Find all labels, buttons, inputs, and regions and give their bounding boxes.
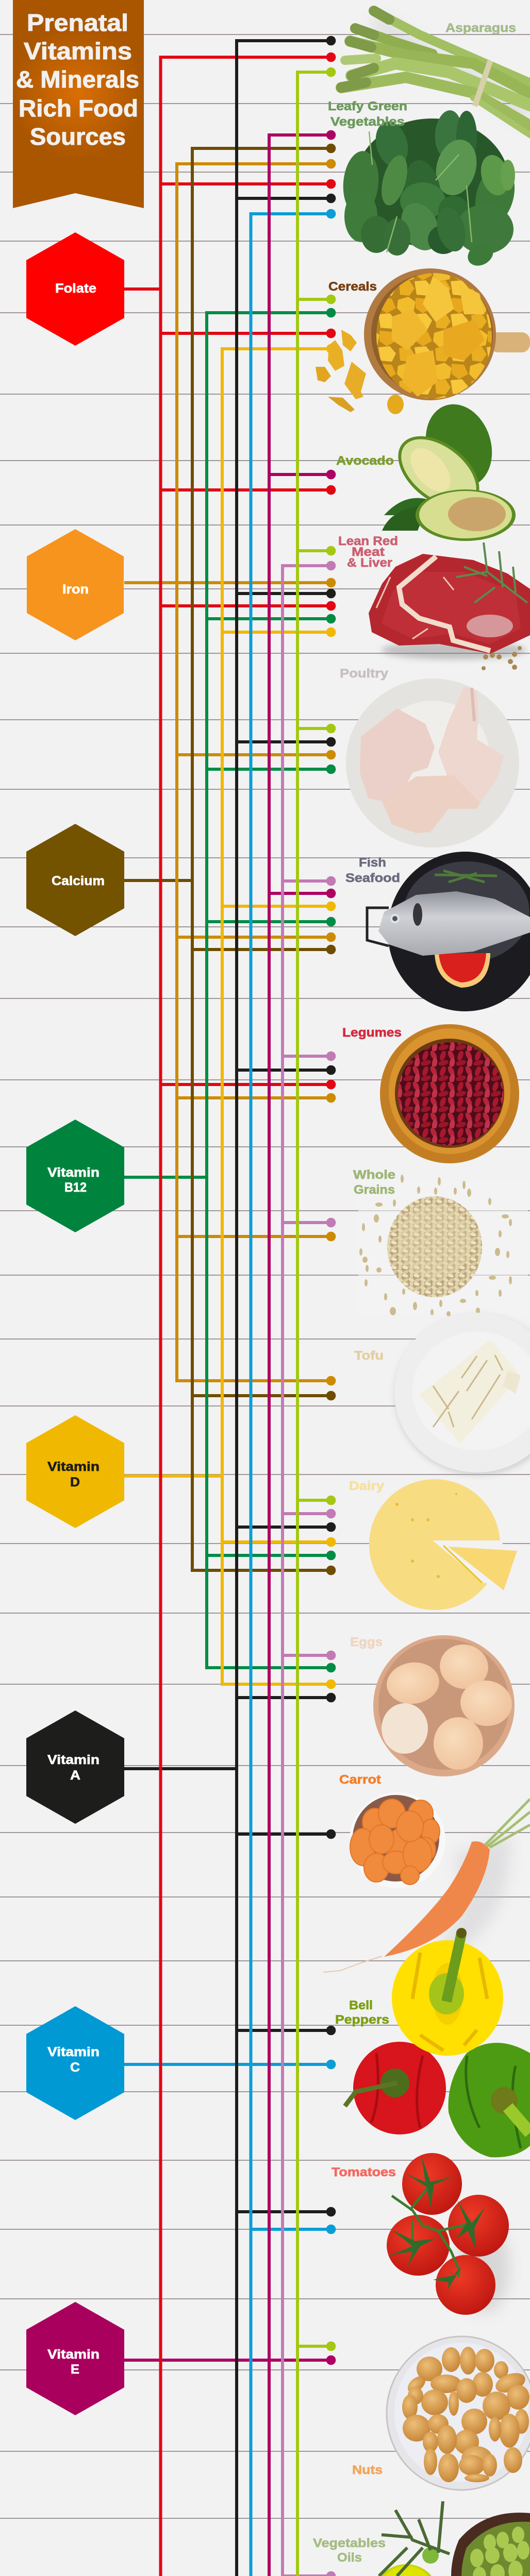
branches: vitamin B complex — [124, 561, 336, 2576]
food image: tofu on white plate — [394, 1313, 530, 1475]
food image: fish on black pan with grapefruit — [367, 852, 530, 1011]
title banner: Rich Food — [19, 95, 138, 122]
hexagon: Vitamin D: Vitamin — [47, 1460, 100, 1474]
label: Tofu: Tofu — [354, 1349, 384, 1363]
branches: zinc — [124, 67, 336, 2576]
label: Lean Red Meat & Liver: Lean Red — [338, 534, 398, 548]
label: Nuts: Nuts — [352, 2463, 383, 2477]
food image: whole grain oats — [358, 1175, 528, 1316]
label: Asparagus: Asparagus — [445, 21, 516, 35]
label: Carrot: Carrot — [339, 1773, 381, 1787]
hexagon: Vitamin D — [26, 1415, 124, 1528]
label: Leafy Green Vegetables: Vegetables — [330, 115, 405, 129]
label: Leafy Green Vegetables — [328, 99, 407, 129]
food image: bowl of cereal flakes — [316, 268, 530, 414]
hexagon: Folate — [26, 232, 124, 346]
label: Fish Seafood: Seafood — [345, 871, 400, 885]
hexagon: Calcium — [26, 824, 124, 936]
vertical trunk lines for all nutrients — [161, 39, 297, 2576]
food image: mixed nuts in glass bowl — [387, 2336, 530, 2490]
label: Leafy Green Vegetables: Leafy Green — [328, 99, 407, 113]
hexagon: Vitamin B12: Vitamin — [47, 1165, 100, 1180]
label: Whole Grains — [353, 1168, 395, 1197]
title banner: Prenatal — [27, 9, 128, 36]
label: Vegetables Oils: Oils — [337, 2551, 362, 2565]
label: Bell Peppers: Bell — [349, 1998, 373, 2012]
branches: calcium — [124, 144, 336, 1575]
label: Avocado: Avocado — [336, 454, 394, 468]
food image: dairy cheese wheel with wedge — [369, 1479, 517, 1610]
label: Eggs: Eggs — [350, 1635, 383, 1649]
branches: folate — [124, 53, 336, 2576]
food image: spinach leaves — [341, 109, 521, 270]
label: Lean Red Meat & Liver — [338, 534, 398, 570]
label: Fish Seafood: Fish — [359, 856, 386, 870]
food image: bell peppers yellow red green — [345, 1928, 530, 2157]
hexagon: Folate: Folate — [55, 281, 96, 296]
hexagon: Vitamin B12: B12 — [64, 1180, 87, 1195]
food image: olives, olive oil and leaves — [373, 2501, 530, 2576]
hexagon: Vitamin A — [26, 1710, 124, 1824]
hexagon: Vitamin C — [26, 2006, 124, 2120]
branches: vitamin B12 — [124, 308, 336, 1672]
food image: tomatoes on the vine — [387, 2153, 509, 2315]
hexagon: Vitamin E: Vitamin — [47, 2347, 100, 2362]
title banner: & Minerals — [16, 66, 139, 93]
hexagon: Vitamin E — [26, 2302, 124, 2415]
branches: vitamin D — [124, 344, 336, 1689]
label: Whole Grains: Whole — [353, 1168, 395, 1182]
food image: carrot slices and whole carrot — [323, 1792, 530, 1973]
label: Bell Peppers — [335, 1998, 389, 2027]
food image: kidney beans in wooden bowl — [380, 1024, 519, 1163]
hexagon: Calcium: Calcium — [52, 874, 105, 888]
title banner — [13, 0, 144, 208]
hexagon: Iron: Iron — [62, 582, 89, 597]
label: Lean Red Meat & Liver: Meat — [352, 545, 385, 559]
label: Whole Grains: Grains — [354, 1183, 395, 1197]
hexagon: Vitamin B12 — [26, 1120, 124, 1232]
food image: avocado — [382, 396, 516, 541]
branches: vitamin E — [124, 130, 336, 2576]
label: Vegetables Oils — [313, 2536, 386, 2565]
label: Poultry: Poultry — [340, 667, 389, 681]
hexagon: Iron — [27, 529, 124, 640]
food image: asparagus — [341, 11, 530, 135]
label: Lean Red Meat & Liver: & Liver — [347, 556, 392, 570]
hexagon: Vitamin D: D — [70, 1475, 80, 1489]
hexagon: Vitamin A: A — [70, 1768, 80, 1783]
label: Cereals: Cereals — [328, 280, 377, 294]
branches: iron — [124, 159, 336, 1385]
label: Legumes: Legumes — [342, 1026, 402, 1040]
food image: red meat with rosemary — [369, 543, 530, 670]
branches: vitamin C — [124, 209, 336, 2576]
label: Fish Seafood — [345, 856, 400, 885]
label: Dairy: Dairy — [349, 1479, 385, 1493]
title banner: Vitamins — [24, 38, 132, 64]
title banner: Sources — [30, 123, 126, 150]
label: Bell Peppers: Peppers — [335, 2013, 389, 2027]
hexagon: Vitamin C: Vitamin — [47, 2045, 100, 2059]
hexagon: Vitamin E: E — [71, 2362, 79, 2377]
label: Vegetables Oils: Vegetables — [313, 2536, 386, 2550]
hexagon: Vitamin C: C — [70, 2060, 80, 2075]
food image: eggs in wooden bowl — [373, 1635, 515, 1776]
branches: vitamin A — [124, 36, 336, 2576]
label: Tomatoes: Tomatoes — [332, 2165, 396, 2179]
hexagon: Vitamin A: Vitamin — [47, 1753, 100, 1767]
food image: poultry on plate — [346, 679, 519, 848]
